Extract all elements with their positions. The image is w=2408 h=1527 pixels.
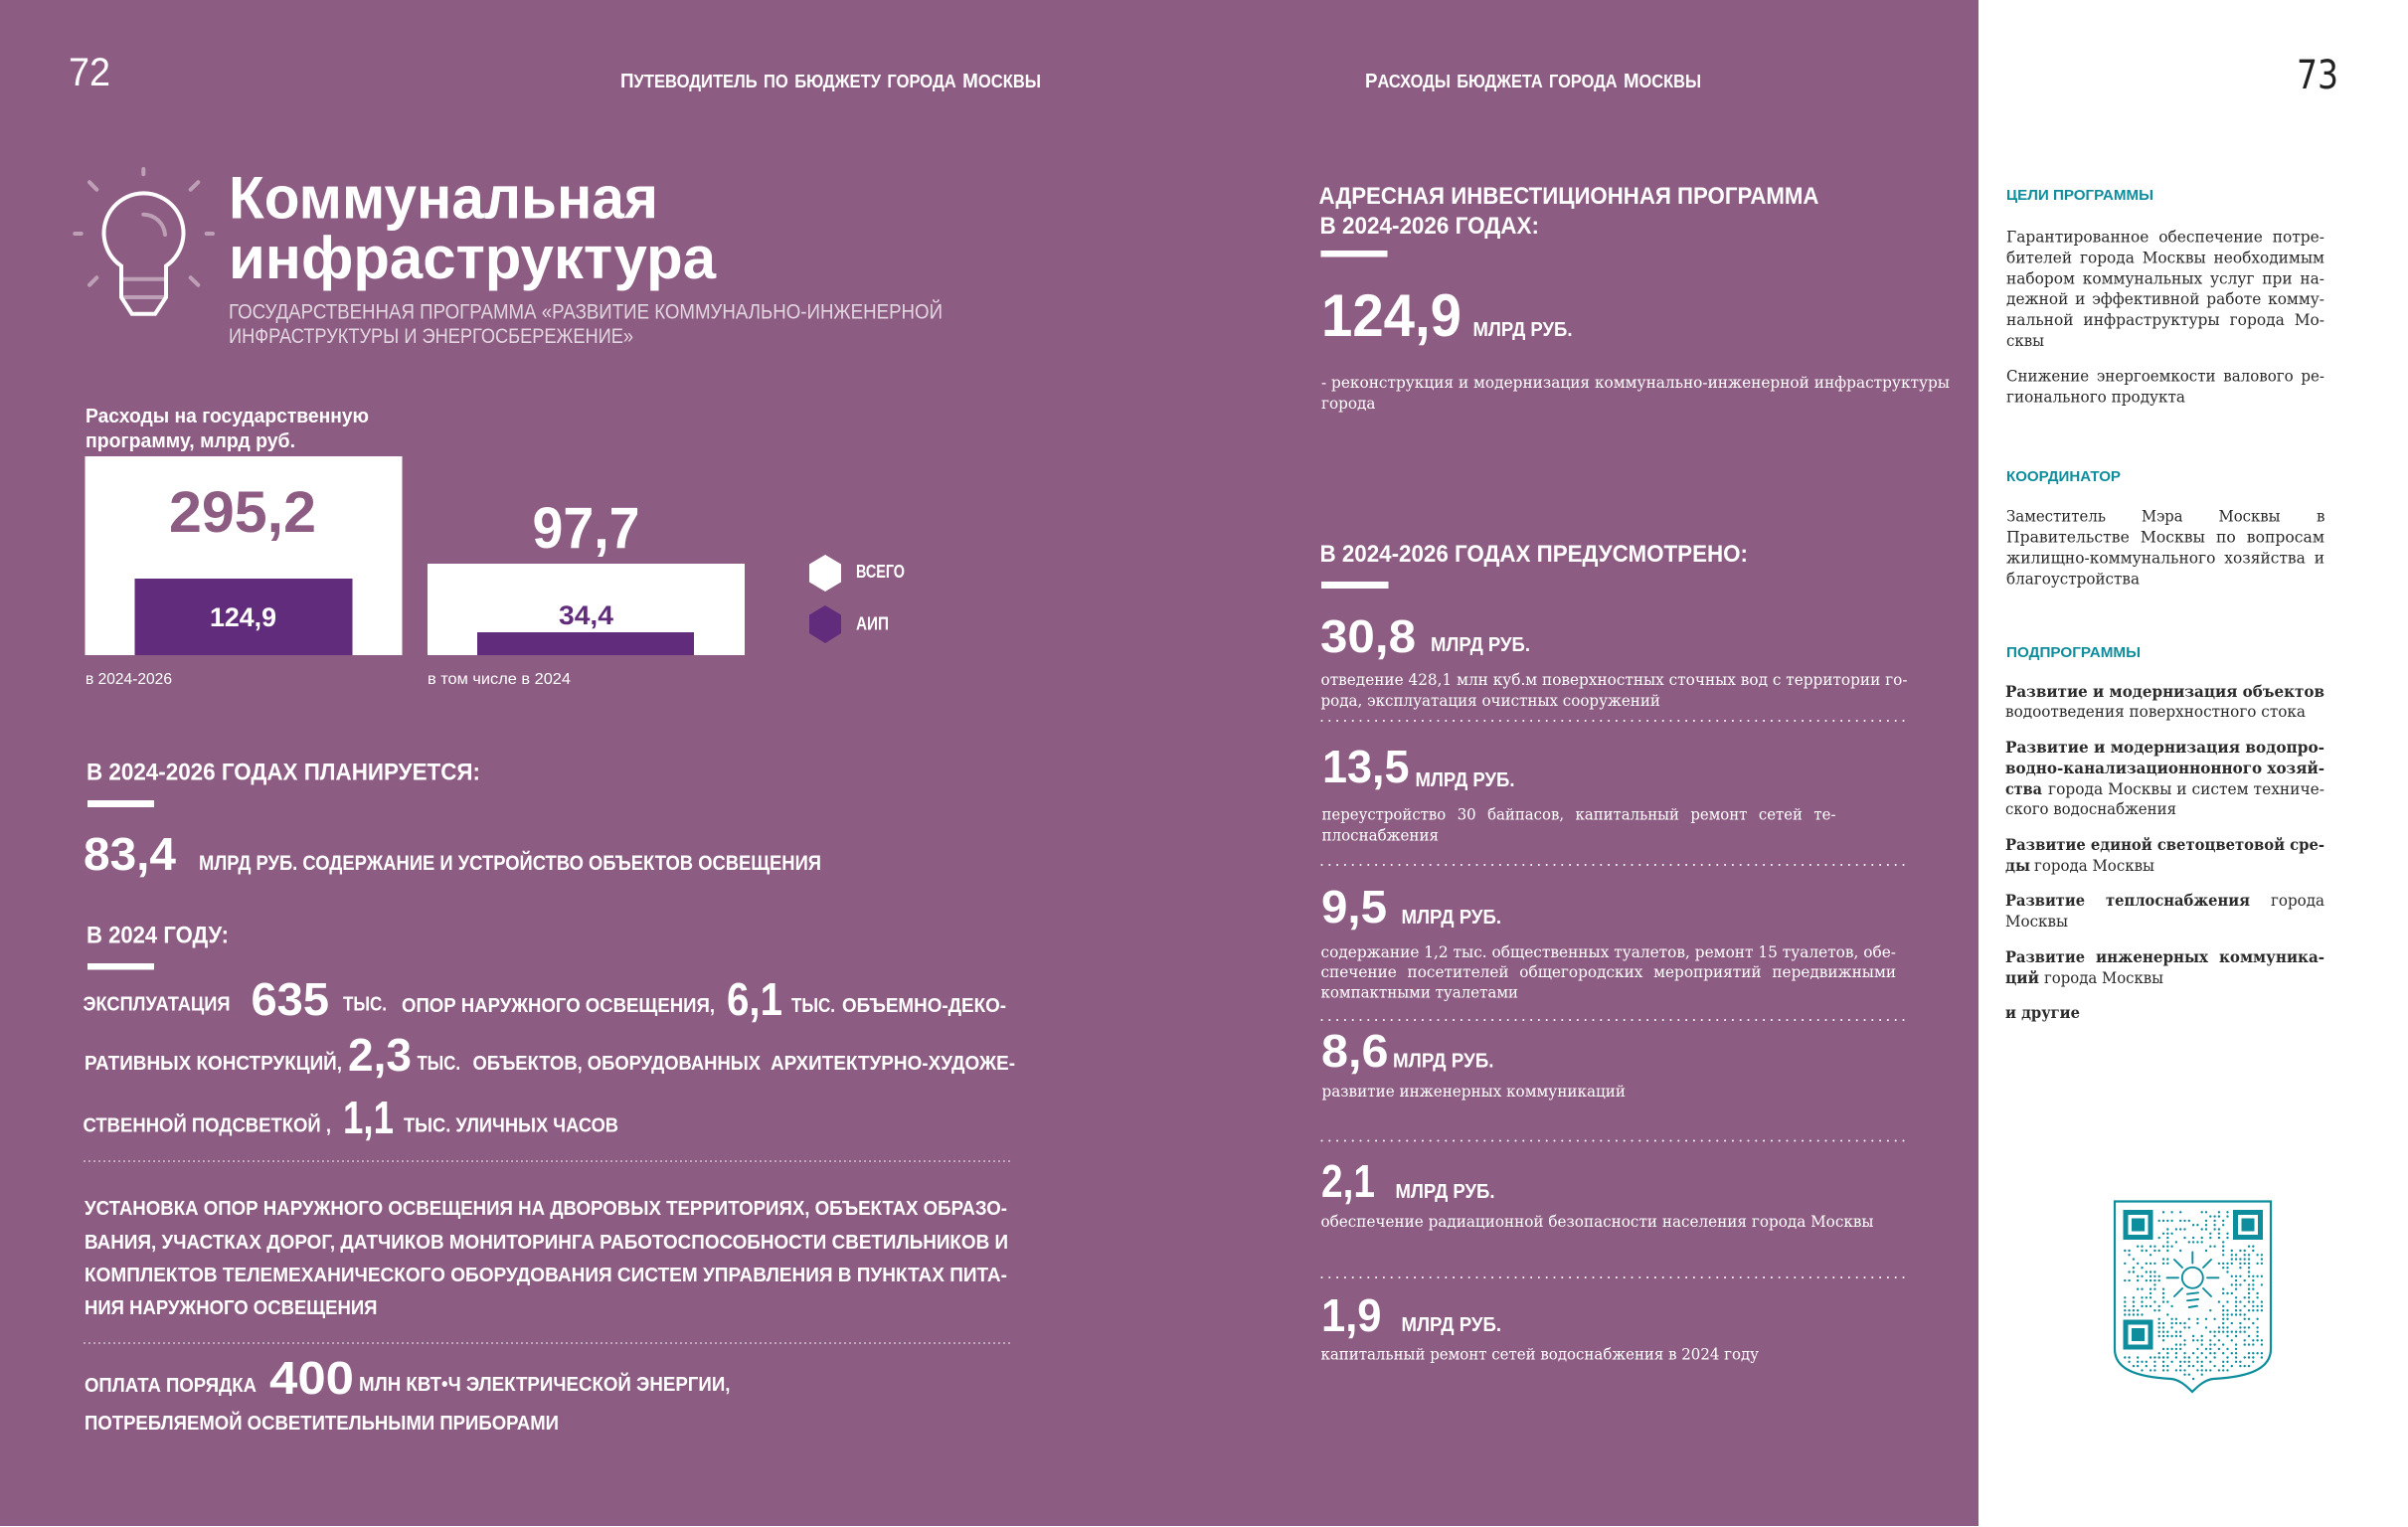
finder squares [2126,1213,2261,1347]
bar: 2024-2026 AIP [135,579,352,655]
section: planned 2024-2026 [84,760,821,880]
sidebar: subprogrammes: Развитие [2005,891,2085,910]
sidebar: subprogrammes: коммуника- [2219,947,2324,966]
section: in 2024: РАТИВНЫХ КОНСТРУКЦИЙ, [85,1051,342,1075]
sidebar: subprogrammes: Развитие [2005,947,2085,966]
heading: provided in 2024-2026 [1320,541,1748,589]
sidebar: subprogrammes: Развитие единой светоцветовой сре- [2005,835,2324,854]
item: 9,5: компактными туалетами [1320,984,1518,1002]
title: инфраструктура [229,225,717,291]
text block: installation of lighting: НИЯ НАРУЖНОГО ОСВЕЩЕНИЯ [85,1297,378,1319]
sidebar: subprogrammes: города Москвы [2044,969,2163,987]
item: 1,9: МЛРД РУБ. [1402,1314,1501,1336]
sidebar: coordinator [2006,468,2325,589]
section: in 2024: 1,1 [343,1092,394,1143]
section: in 2024: ОБЪЕКТОВ, ОБОРУДОВАННЫХ [473,1053,762,1075]
section: in 2024: ОБЪЕМНО-ДЕКО- [842,995,1006,1017]
text block: electricity payment: 400 [269,1352,354,1404]
sidebar: subprogrammes: ства [2005,779,2042,798]
section: in 2024: ЭКСПЛУАТАЦИЯ [84,994,231,1016]
legend: ВСЕГО [856,562,905,582]
text block: electricity payment [85,1352,730,1435]
section: address investment programme: 124,9 [1321,282,1462,349]
sidebar: programme goals: Снижение энергоемкости валового ре- [2006,368,2324,386]
section: address investment programme: - реконструкция и модернизация коммунально-инженерной инфраструктуры [1321,374,1950,392]
sidebar: programme goals: гионального продукта [2006,388,2185,406]
chart heading [86,406,369,452]
bar: 2024-2026 total: 295,2 [169,480,316,545]
item: 30,8 [1320,610,1907,710]
section: in 2024: ТЫС. [343,994,387,1016]
bar: 2024 AIP: 34,4 [559,600,613,630]
item: 8,6: 8,6 [1321,1025,1388,1077]
heading: provided in 2024-2026: В 2024-2026 ГОДАХ ПРЕДУСМОТРЕНО: [1320,541,1748,568]
item: 9,5: спечение посетителей общегородских мероприятий передвижными [1320,963,1896,981]
item: 9,5 [1320,881,1896,1002]
item: 30,8: рода, эксплуатация очистных сооружений [1320,692,1660,710]
item: 30,8: МЛРД РУБ. [1431,634,1530,656]
item: 2,1: обеспечение радиационной безопасности населения города Москвы [1320,1213,1873,1231]
sidebar: coordinator: КООРДИНАТОР [2006,468,2121,485]
bar: 2024-2026 total [86,456,402,655]
section: in 2024: 6,1 [727,973,782,1025]
item: 8,6: МЛРД РУБ. [1393,1050,1493,1072]
item: 13,5: 13,5 [1322,741,1410,792]
sidebar: subprogrammes: города [2271,892,2324,910]
item: 2,1 [1320,1155,1873,1231]
item: 9,5: содержание 1,2 тыс. общественных туалетов, ремонт 15 туалетов, обе- [1320,943,1896,961]
item: 13,5 [1322,741,1835,845]
section: in 2024 [84,923,1015,1143]
text block: electricity payment: ОПЛАТА ПОРЯДКА [85,1375,257,1397]
bar: 2024 total: 97,7 [533,496,640,561]
sidebar: subprogrammes: и другие [2005,1003,2080,1022]
item: 2,1: МЛРД РУБ. [1396,1181,1495,1203]
subtitle [229,300,943,348]
title [229,165,717,291]
section: address investment programme [1318,183,1950,413]
section: in 2024: СТВЕННОЙ ПОДСВЕТКОЙ , [84,1113,331,1137]
section: address investment programme: АДРЕСНАЯ ИНВЕСТИЦИОННАЯ ПРОГРАММА [1318,183,1819,210]
sidebar: programme goals: Гарантированное обеспечение потре- [2006,229,2324,247]
sidebar: subprogrammes: инженерных [2096,947,2209,966]
item: 30,8: 30,8 [1320,610,1416,662]
section: in 2024: АРХИТЕКТУРНО-ХУДОЖЕ- [771,1053,1015,1075]
QR code in shield [2115,1201,2271,1392]
sidebar: subprogrammes [2005,644,2324,1022]
item: 1,9: капитальный ремонт сетей водоснабжения в 2024 году [1320,1346,1759,1364]
section: in 2024: ТЫС. [791,995,835,1017]
sidebar: coordinator: Заместитель [2006,507,2106,525]
bar: 2024-2026 AIP: 124,9 [210,602,276,632]
item: 1,9: 1,9 [1321,1289,1382,1341]
text block: electricity payment: МЛН КВТ•Ч ЭЛЕКТРИЧЕСКОЙ ЭНЕРГИИ, [359,1372,730,1396]
page number 73: 73 [2297,53,2338,98]
bar chart [86,456,745,688]
sidebar: subprogrammes: Москвы [2005,913,2068,931]
section: address investment programme: В 2024-2026 ГОДАХ: [1320,213,1539,240]
item: 2,1: 2,1 [1321,1155,1375,1207]
item: 9,5: МЛРД РУБ. [1402,907,1501,929]
item: 13,5: переустройство 30 байпасов, капитальный ремонт сетей те- [1322,805,1835,823]
sidebar: subprogrammes: города Москвы [2034,857,2154,875]
item: 13,5: плоснабжения [1322,827,1439,845]
sidebar: subprogrammes: водно-канализационнонного хозяй- [2005,759,2324,777]
legend: АИП [856,614,889,634]
sidebar: programme goals: набором коммунальных услуг при на- [2006,270,2324,288]
sidebar: subprogrammes: Развитие и модернизация объектов [2005,682,2324,701]
section: address investment programme: города [1321,395,1376,413]
section: in 2024: 2,3 [348,1029,412,1081]
shield outline [2115,1201,2271,1392]
item: 30,8: отведение 428,1 млн куб.м поверхностных сточных вод с территории го- [1320,671,1907,689]
section: in 2024: ОПОР НАРУЖНОГО ОСВЕЩЕНИЯ, [402,995,715,1017]
text block: installation of lighting [85,1198,1008,1319]
sidebar: subprogrammes: ций [2005,968,2039,987]
text block: installation of lighting: ВАНИЯ, УЧАСТКАХ ДОРОГ, ДАТЧИКОВ МОНИТОРИНГА РАБОТОСПОСОБНОСТИ СВЕТИЛЬНИКОВ И [85,1232,1008,1254]
sidebar: programme goals: нальной инфраструктуры города Мо- [2006,311,2324,329]
sidebar: coordinator: жилищно-коммунального хозяйства и [2006,549,2324,567]
data modules [2125,1212,2262,1379]
item: 1,9 [1320,1289,1759,1364]
sidebar: subprogrammes: ды [2005,856,2030,875]
sun emblem [2167,1253,2219,1307]
sidebar: subprogrammes: города Москвы и систем техниче- [2048,780,2324,798]
sidebar: subprogrammes: водоотведения поверхностного стока [2005,703,2306,721]
item: 9,5: 9,5 [1321,881,1387,933]
item: 13,5: МЛРД РУБ. [1416,769,1515,791]
sidebar: coordinator: Москвы [2219,507,2281,525]
sidebar: coordinator: благоустройства [2006,571,2140,589]
item: 8,6: развитие инженерных коммуникаций [1322,1083,1626,1101]
running header left: Путеводитель по бюджету города Москвы [620,66,1041,93]
title: Коммунальная [229,165,658,231]
bar: 2024 AIP [477,600,694,655]
section: in 2024: 635 [251,973,329,1025]
running header right: Расходы бюджета города Москвы [1365,66,1701,93]
sidebar: coordinator: в [2317,507,2325,525]
page number 72: 72 [69,51,110,94]
sidebar: programme goals: сквы [2006,332,2044,350]
sidebar: subprogrammes: Развитие и модернизация водопро- [2005,738,2324,757]
text block: electricity payment: ПОТРЕБЛЯЕМОЙ ОСВЕТИТЕЛЬНЫМИ ПРИБОРАМИ [85,1411,559,1435]
section: in 2024: В 2024 ГОДУ: [86,923,229,948]
section: address investment programme: МЛРД РУБ. [1473,319,1573,341]
sidebar: coordinator: Мэра [2142,507,2183,525]
sidebar: subprogrammes: теплоснабжения [2106,891,2250,910]
bar: 2024 total [428,496,745,655]
sidebar: programme goals: бителей города Москвы необходимым [2006,249,2324,266]
text block: installation of lighting: КОМПЛЕКТОВ ТЕЛЕМЕХАНИЧЕСКОГО ОБОРУДОВАНИЯ СИСТЕМ УПРАВЛЕНИЯ В ПУНКТАХ ПИТА- [85,1265,1007,1286]
section: planned 2024-2026: МЛРД РУБ. СОДЕРЖАНИЕ И УСТРОЙСТВО ОБЪЕКТОВ ОСВЕЩЕНИЯ [199,851,821,875]
axis label 2024: в том числе в 2024 [428,671,571,688]
chart heading: Расходы на государственную [86,406,369,427]
legend [809,555,905,643]
sidebar: coordinator: Правительстве Москвы по вопросам [2006,529,2324,547]
sidebar: programme goals [2006,187,2324,406]
section: in 2024: ТЫС. [418,1053,460,1075]
sidebar: subprogrammes: ПОДПРОГРАММЫ [2006,644,2141,661]
icon: light bulb [75,169,213,314]
item: 8,6 [1321,1025,1626,1101]
section: planned 2024-2026: 83,4 [84,828,176,880]
subtitle: ИНФРАСТРУКТУРЫ И ЭНЕРГОСБЕРЕЖЕНИЕ» [229,325,633,348]
section: planned 2024-2026: В 2024-2026 ГОДАХ ПЛАНИРУЕТСЯ: [86,760,480,785]
sidebar: programme goals: дежной и эффективной работе комму- [2006,290,2324,308]
section: in 2024: ТЫС. УЛИЧНЫХ ЧАСОВ [404,1115,618,1137]
sidebar: subprogrammes: ского водоснабжения [2005,800,2176,818]
sidebar: programme goals: ЦЕЛИ ПРОГРАММЫ [2006,187,2153,204]
text block: installation of lighting: УСТАНОВКА ОПОР НАРУЖНОГО ОСВЕЩЕНИЯ НА ДВОРОВЫХ ТЕРРИТОРИЯХ, ОБЪЕКТАХ ОБРАЗО- [85,1198,1007,1220]
chart heading: программу, млрд руб. [86,430,295,452]
subtitle: ГОСУДАРСТВЕННАЯ ПРОГРАММА «РАЗВИТИЕ КОММУНАЛЬНО-ИНЖЕНЕРНОЙ [229,300,943,324]
axis label 2024-2026: в 2024-2026 [86,671,172,688]
